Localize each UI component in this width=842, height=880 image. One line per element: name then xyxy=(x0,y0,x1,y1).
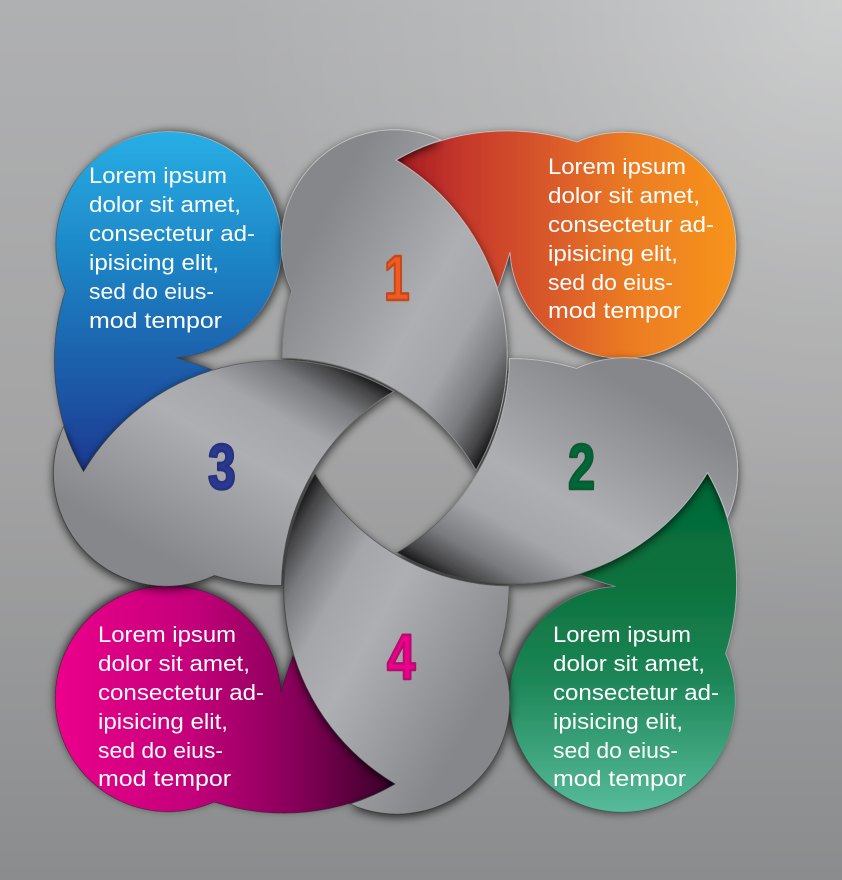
blue callout shape xyxy=(54,132,282,472)
green callout shape xyxy=(509,472,737,812)
panel: blue callout xyxy=(54,132,282,472)
petal 3 with number xyxy=(53,360,394,586)
petal 4 with number xyxy=(284,474,510,814)
magenta callout text: Lorem ipsum xyxy=(98,622,236,647)
blue callout text: dolor sit amet, xyxy=(89,192,241,217)
orange callout text: ipisicing elit, xyxy=(548,241,678,266)
petal 4 with number: 4 xyxy=(387,623,415,693)
green callout text: mod tempor xyxy=(553,766,686,791)
pinwheel of gray petals xyxy=(53,130,738,814)
magenta callout text: mod tempor xyxy=(98,766,231,791)
green callout text: Lorem ipsum xyxy=(553,622,691,647)
orange callout text: consectetur ad- xyxy=(548,212,714,237)
magenta callout text: dolor sit amet, xyxy=(98,651,250,676)
petal 1 with number: 1 xyxy=(384,243,410,314)
orange callout text: mod tempor xyxy=(548,298,681,323)
orange callout text: Lorem ipsum xyxy=(548,154,686,179)
blue callout text: sed do eius- xyxy=(89,279,214,304)
blue callout text xyxy=(89,163,255,333)
petal 3 with number: 3 xyxy=(208,432,236,503)
magenta callout shape xyxy=(55,586,395,813)
magenta callout text: sed do eius- xyxy=(98,738,223,763)
magenta callout text: consectetur ad- xyxy=(98,680,264,705)
blue callout text: ipisicing elit, xyxy=(89,250,219,275)
orange callout text: dolor sit amet, xyxy=(548,183,700,208)
petal 2 with number xyxy=(398,358,738,584)
orange callout text xyxy=(548,154,714,323)
orange callout shape xyxy=(396,131,736,358)
orange callout text: sed do eius- xyxy=(548,270,673,295)
magenta callout text: ipisicing elit, xyxy=(98,709,228,734)
blue callout text: Lorem ipsum xyxy=(89,163,227,188)
blue callout text: consectetur ad- xyxy=(89,221,255,246)
green callout text: dolor sit amet, xyxy=(553,651,705,676)
panel: magenta callout xyxy=(55,586,395,813)
petal 1 with number xyxy=(281,130,507,470)
magenta callout text xyxy=(98,622,264,791)
panel: green callout xyxy=(509,472,737,812)
green callout text xyxy=(553,622,719,791)
green callout text: consectetur ad- xyxy=(553,680,719,705)
green callout text: ipisicing elit, xyxy=(553,709,683,734)
blue callout text: mod tempor xyxy=(89,308,222,333)
panel: orange callout xyxy=(396,131,736,358)
green callout text: sed do eius- xyxy=(553,738,678,763)
petal 2 with number: 2 xyxy=(568,433,595,504)
